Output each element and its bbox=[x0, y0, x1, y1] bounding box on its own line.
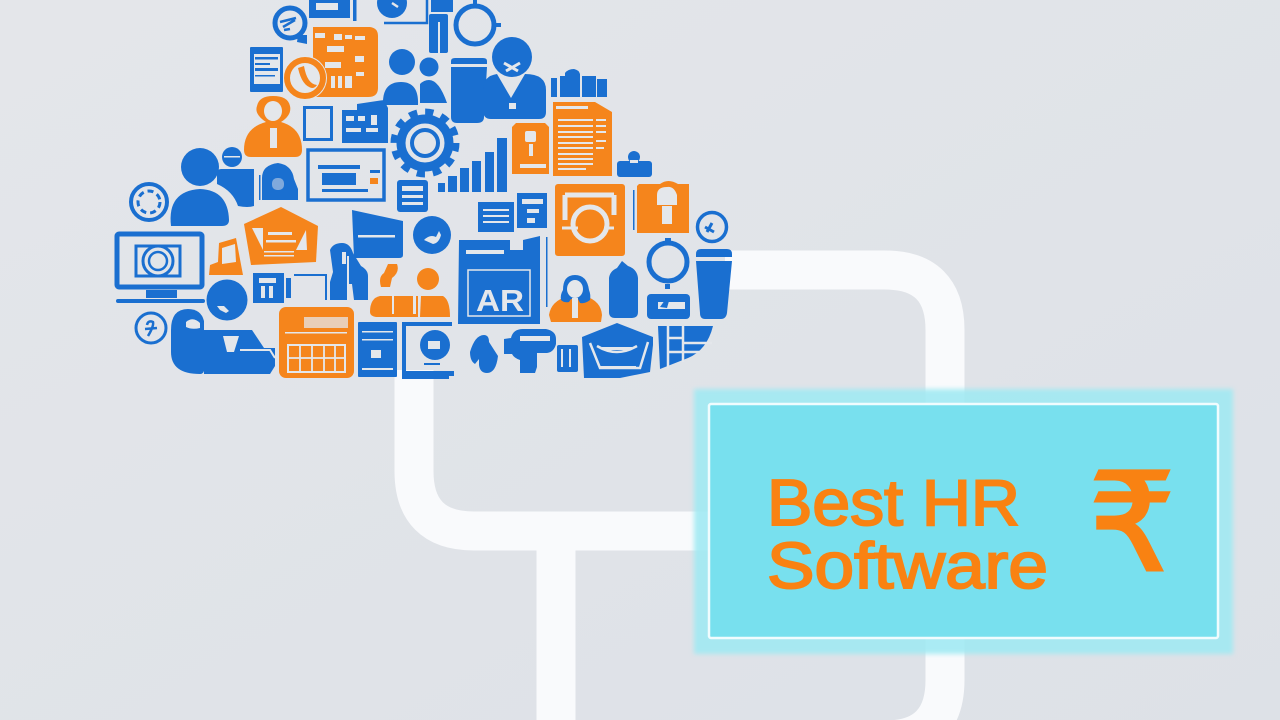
panel face bbox=[709, 404, 1218, 638]
icon: blue buildings bbox=[551, 69, 607, 97]
icon: head bbox=[206, 280, 248, 320]
icon: grid shape bbox=[658, 326, 713, 369]
icon: chat badge top bbox=[275, 8, 307, 44]
icon: orange camera bbox=[633, 181, 689, 233]
panel: Best HR Software bbox=[694, 389, 1233, 654]
icon: blue box bbox=[647, 294, 690, 319]
icon: blue circle badge left bbox=[131, 184, 167, 220]
icon: rupee symbol: ₹ bbox=[1089, 445, 1175, 603]
icon: orange document bbox=[313, 27, 378, 97]
connector lines bbox=[414, 270, 945, 720]
icon: blue plug bbox=[470, 335, 498, 373]
icon: orange framed face bbox=[555, 184, 625, 256]
heading line two: Software bbox=[767, 529, 1048, 602]
icon: orange calendar bbox=[279, 307, 354, 378]
icon: orange badge bbox=[512, 123, 549, 174]
icon cloud bbox=[116, 0, 732, 378]
icon: standing figure bbox=[429, 0, 453, 53]
icon: AR panel: AR bbox=[476, 283, 524, 318]
icon: outlined square bbox=[304, 108, 332, 140]
icon: orange phone circle bbox=[283, 56, 327, 100]
icon: tall cup bbox=[696, 249, 732, 319]
icon: ring bbox=[649, 238, 687, 289]
icon: clock screen bbox=[377, 0, 427, 23]
icon: orange person bbox=[244, 96, 302, 157]
icon: blue envelope bottom bbox=[582, 323, 653, 378]
icon: small blue box and frame bbox=[253, 273, 326, 303]
icon: blue screen bbox=[308, 150, 384, 200]
icon: AR panel bbox=[458, 236, 548, 324]
icon: gear ring bbox=[456, 0, 501, 44]
icon: small badge right bbox=[698, 212, 726, 242]
icon: orange envelope bbox=[244, 207, 318, 265]
icon: blue globe bbox=[413, 216, 451, 254]
icon: gear bbox=[395, 113, 455, 173]
icon: orange person with hair bbox=[549, 275, 602, 322]
heading: Best HR bbox=[767, 466, 1020, 539]
icon: blue seated person bbox=[330, 243, 368, 300]
icon: monitor bbox=[116, 234, 205, 303]
icon: blue headset bbox=[259, 163, 298, 200]
icon: orange team bbox=[370, 264, 450, 317]
icon: orange hard hat bbox=[209, 238, 243, 275]
icon: headset screen bbox=[404, 324, 454, 377]
icon: bar chart bbox=[438, 138, 507, 192]
icon: blue folder bbox=[342, 100, 388, 143]
icon: blue small panel bbox=[397, 180, 428, 212]
icon: two people bbox=[383, 49, 447, 105]
icon: blue tablet bbox=[250, 47, 283, 92]
icon: blue doc bottom bbox=[358, 322, 397, 377]
icon: blue cup bbox=[451, 58, 487, 123]
icon: blue flag bbox=[352, 210, 403, 258]
icon: blue bag bbox=[617, 151, 652, 177]
icon: small badge left bbox=[136, 313, 166, 343]
icon: pill bbox=[609, 261, 638, 318]
icon: blue camera bbox=[504, 329, 578, 373]
icon: person with laptop bbox=[171, 309, 275, 374]
icon: orange paper bbox=[553, 102, 612, 176]
icon: blue laptop bbox=[309, 0, 356, 21]
icon: blue document pair bbox=[478, 193, 547, 232]
panel glow bbox=[694, 389, 1233, 654]
icon: person group left bbox=[171, 147, 254, 226]
icon: large blue person bbox=[483, 37, 546, 119]
